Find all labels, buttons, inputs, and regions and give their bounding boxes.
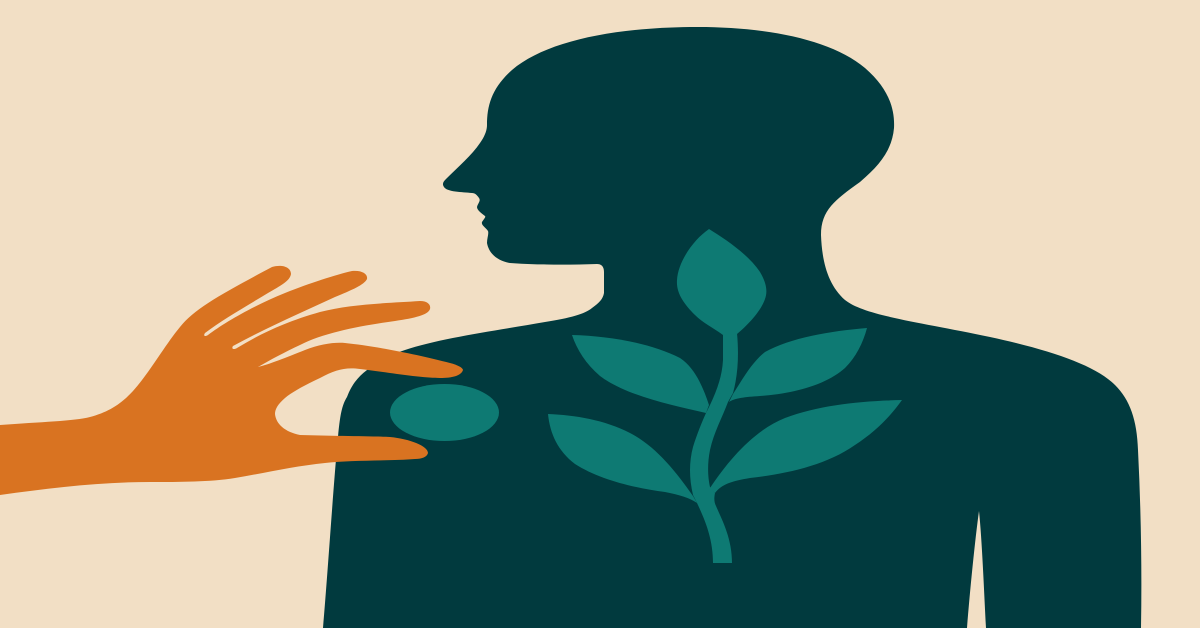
top leaf (677, 229, 766, 335)
human silhouette (323, 27, 1141, 628)
lower left leaf (548, 414, 697, 503)
plant (548, 229, 902, 563)
plant stem (690, 333, 738, 563)
lower right leaf (710, 400, 902, 493)
upper left leaf (572, 335, 709, 413)
oval pill (390, 384, 499, 441)
orange hand (0, 266, 463, 495)
upper right leaf (729, 328, 867, 402)
